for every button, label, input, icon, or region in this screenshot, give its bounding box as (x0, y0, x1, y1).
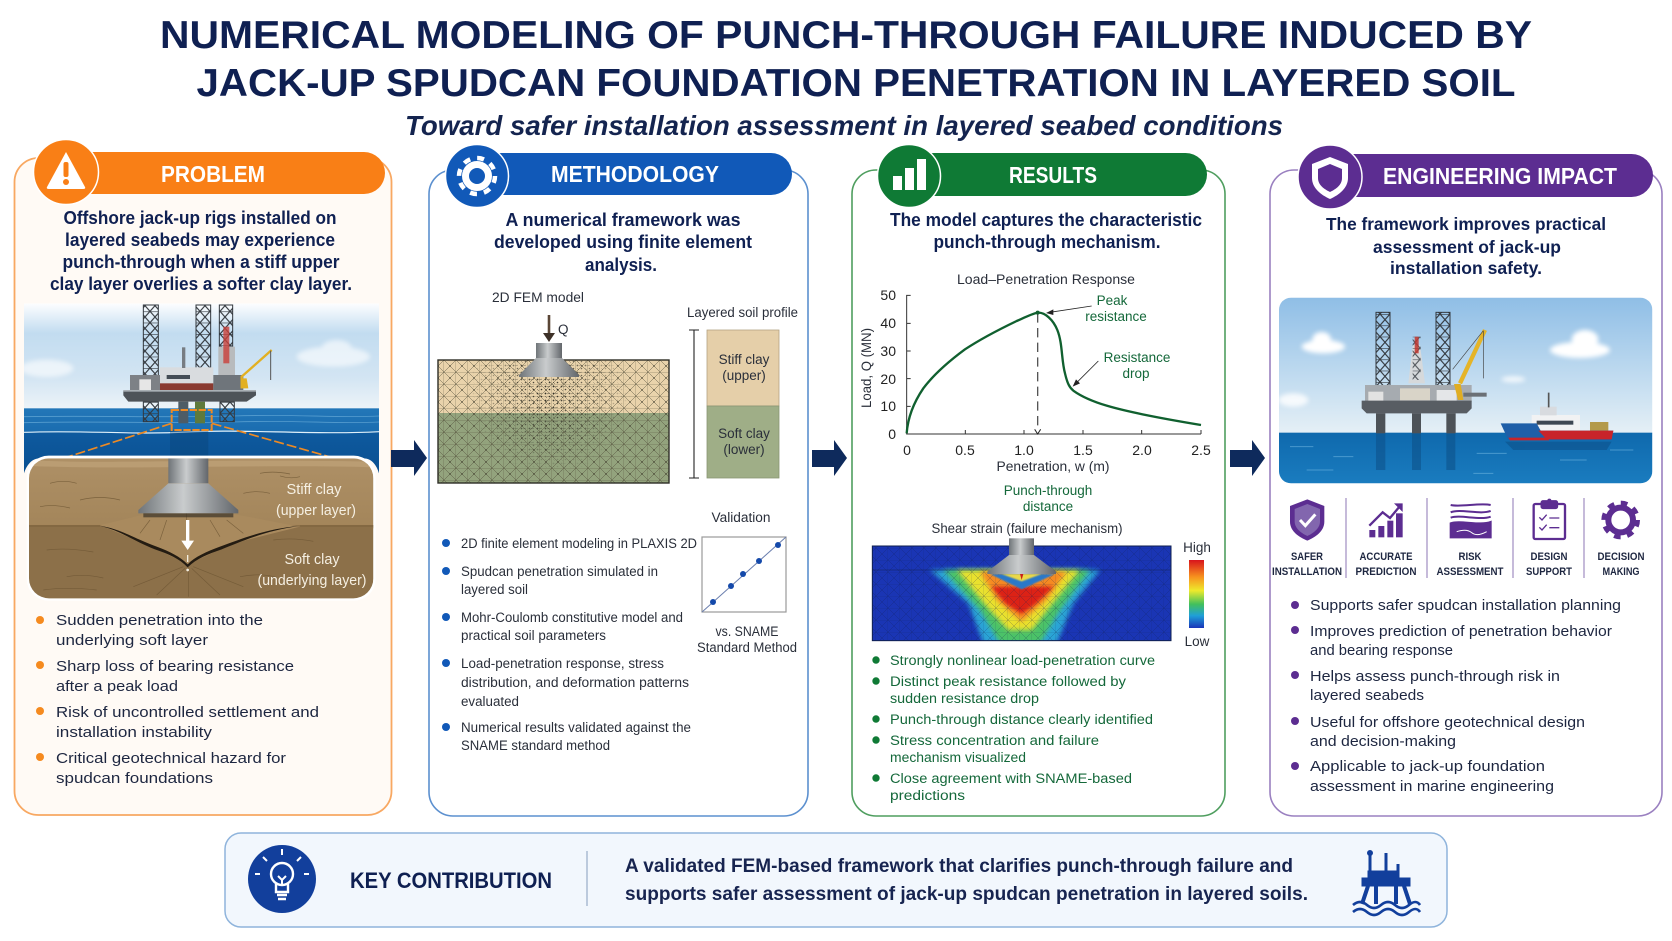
engineering impact header (1298, 145, 1653, 209)
colour scale legend (1183, 540, 1211, 649)
icon labels: PREDICTION (1356, 566, 1417, 578)
engineering impact bullet list: Improves prediction of penetration behavior (1310, 623, 1612, 640)
FEM mesh diagram (438, 290, 669, 483)
problem statement: punch-through when a stiff upper (62, 252, 340, 272)
results bullet list (872, 653, 1155, 803)
shear strain heat map (872, 521, 1171, 643)
icon labels: MAKING (1602, 566, 1640, 578)
line chart: load-penetration response: distance (1023, 499, 1073, 514)
methodology bullet list: Spudcan penetration simulated in (461, 564, 658, 579)
engineering impact bullet list: layered seabeds (1310, 687, 1424, 704)
results bullet list: Stress concentration and failure (890, 733, 1099, 748)
line chart: load-penetration response: 50 (880, 287, 896, 303)
line chart: load-penetration response: resistance (1085, 309, 1147, 324)
icon: decision making (1604, 503, 1637, 537)
problem statement: layered seabeds may experience (65, 230, 335, 250)
methodology bullet list: layered soil (461, 582, 528, 597)
problem bullet list: spudcan foundations (56, 770, 213, 787)
results header (878, 144, 1207, 208)
engineering impact statement: installation safety. (1390, 258, 1542, 278)
line chart: load-penetration response: Resistance (1104, 350, 1170, 365)
results bullet list: Distinct peak resistance followed by (890, 674, 1126, 689)
layered soil profile: Stiff clay (719, 352, 770, 367)
problem bullet list (36, 612, 319, 787)
problem bullet list: Sharp loss of bearing resistance (56, 658, 294, 675)
results statement: punch-through mechanism. (934, 232, 1160, 252)
engineering impact header: ENGINEERING IMPACT (1383, 163, 1617, 189)
soil cross-section (27, 456, 376, 601)
engineering impact bullet list: assessment in marine engineering (1310, 778, 1554, 795)
line chart: load-penetration response: 20 (880, 371, 896, 387)
methodology statement (494, 210, 752, 275)
icon: accurate prediction (1369, 503, 1403, 537)
results bullet list: Punch-through distance clearly identified (890, 712, 1153, 727)
methodology bullet list: distribution, and deformation patterns (461, 675, 689, 690)
methodology bullet list: Mohr-Coulomb constitutive model and (461, 610, 683, 625)
panel: methodology (429, 144, 808, 816)
panel: results (852, 144, 1225, 816)
engineering impact bullet list: Supports safer spudcan installation planning (1310, 597, 1621, 614)
FEM mesh diagram: Q (558, 322, 569, 337)
layered soil profile: Layered soil profile (687, 305, 798, 320)
engineering impact bullet list: and bearing response (1310, 642, 1453, 659)
problem statement: clay layer overlies a softer clay layer. (50, 274, 352, 294)
icon: light bulb (248, 845, 316, 913)
layered soil profile: (upper) (722, 368, 766, 383)
line chart: load-penetration response: Load, Q (MN) (859, 328, 874, 408)
line chart: load-penetration response: 2.5 (1191, 442, 1211, 458)
line chart: load-penetration response: 40 (880, 315, 896, 331)
line chart: load-penetration response (859, 272, 1211, 514)
problem statement (50, 208, 352, 294)
rig (1376, 312, 1390, 386)
icon: design support (1534, 499, 1565, 539)
arrow: methodology to results (812, 440, 847, 476)
engineering impact statement: The framework improves practical (1326, 214, 1606, 234)
line chart: load-penetration response: 30 (880, 343, 896, 359)
problem header (34, 140, 385, 204)
methodology bullet list: 2D finite element modeling in PLAXIS 2D (461, 536, 697, 551)
engineering impact bullet list: Useful for offshore geotechnical design (1310, 714, 1585, 731)
icon labels: SUPPORT (1526, 566, 1572, 578)
results bullet list: predictions (890, 788, 965, 803)
panel: engineering impact (1270, 145, 1662, 816)
methodology bullet list: practical soil parameters (461, 628, 606, 643)
FEM mesh diagram: 2D FEM model (492, 290, 584, 305)
arrow: problem to methodology (391, 440, 427, 476)
key contribution banner (225, 833, 1447, 927)
methodology bullet list: SNAME standard method (461, 738, 610, 753)
icon labels (1272, 551, 1645, 578)
orange zoom call-out (172, 410, 212, 430)
arrow: results to engineering impact (1230, 440, 1265, 476)
soil labels (258, 481, 366, 589)
results bullet list: Close agreement with SNAME-based (890, 771, 1132, 786)
ship (1532, 415, 1580, 431)
panel: problem (14, 140, 392, 815)
results statement: The model captures the characteristic (890, 210, 1202, 230)
line chart: load-penetration response: Punch-through (1004, 483, 1092, 498)
layered soil profile: Soft clay (718, 426, 770, 441)
key contribution text: A validated FEM-based framework that clarifies punch-through failure and (625, 855, 1293, 877)
validation plot: vs. SNAME (716, 624, 778, 639)
methodology statement: A numerical framework was (506, 210, 740, 230)
layered soil profile: (lower) (723, 442, 765, 457)
engineering impact statement: assessment of jack-up (1373, 237, 1561, 257)
impact icon row (1272, 498, 1645, 578)
key contribution label: KEY CONTRIBUTION (350, 868, 552, 893)
engineering impact bullet list: Applicable to jack-up foundation (1310, 758, 1545, 775)
problem bullet list: Critical geotechnical hazard for (56, 750, 286, 767)
problem bullet list: Sudden penetration into the (56, 612, 263, 629)
methodology header (446, 144, 792, 208)
title (160, 14, 1532, 105)
icon labels: SAFER (1291, 551, 1323, 563)
title: JACK-UP SPUDCAN FOUNDATION PENETRATION IN LAYERED SOIL (196, 62, 1516, 105)
validation plot: Standard Method (697, 640, 797, 655)
engineering impact statement (1326, 214, 1606, 278)
problem bullet list: underlying soft layer (56, 632, 208, 649)
icon labels: ASSESSMENT (1436, 566, 1504, 578)
line chart: load-penetration response: Penetration, w (m) (996, 459, 1110, 474)
line chart: load-penetration response: Peak (1097, 293, 1128, 308)
icon labels: RISK (1458, 551, 1482, 563)
colour scale legend: Low (1185, 634, 1210, 649)
engineering impact bullet list: Helps assess punch-through risk in (1310, 668, 1560, 685)
engineering impact bullet list (1291, 597, 1621, 795)
soil labels: (upper layer) (276, 502, 356, 519)
methodology statement: developed using finite element (494, 232, 752, 252)
methodology bullet list: evaluated (461, 694, 519, 709)
results header: RESULTS (1009, 162, 1097, 188)
colour scale legend: High (1183, 540, 1211, 555)
soil labels: Soft clay (284, 551, 340, 568)
illustration: jack-up rig at sea with soil cross-section (20, 303, 379, 601)
methodology bullet list: Load-penetration response, stress (461, 656, 664, 671)
key contribution text (625, 855, 1308, 905)
soil labels: Stiff clay (286, 481, 342, 498)
validation plot (697, 510, 797, 655)
icon labels: INSTALLATION (1272, 566, 1342, 578)
problem statement: Offshore jack-up rigs installed on (64, 208, 336, 228)
line chart: load-penetration response: Load–Penetration Response (957, 272, 1135, 287)
line chart: load-penetration response: drop (1122, 366, 1150, 381)
line chart: load-penetration response: 1.0 (1014, 442, 1034, 458)
line chart: load-penetration response: 1.5 (1073, 442, 1093, 458)
problem bullet list: Risk of uncontrolled settlement and (56, 704, 319, 721)
results bullet list: Strongly nonlinear load-penetration curve (890, 653, 1155, 668)
line chart: load-penetration response: 0 (888, 426, 896, 442)
methodology bullet list (442, 536, 697, 753)
icon labels: DECISION (1598, 551, 1645, 563)
shear strain heat map: Shear strain (failure mechanism) (932, 521, 1122, 536)
line chart: load-penetration response: 10 (880, 398, 896, 414)
engineering impact bullet list: and decision-making (1310, 733, 1456, 750)
icon: risk assessment (1451, 504, 1491, 537)
problem bullet list: after a peak load (56, 678, 178, 695)
key contribution text: supports safer assessment of jack-up spudcan penetration in layered soils. (625, 883, 1308, 905)
line chart: load-penetration response: 2.0 (1132, 442, 1152, 458)
methodology header: METHODOLOGY (551, 161, 719, 187)
subtitle: Toward safer installation assessment in layered seabed conditions (405, 110, 1283, 141)
results statement (890, 210, 1202, 252)
validation plot: Validation (712, 510, 770, 525)
icon labels: ACCURATE (1360, 551, 1412, 563)
icon labels: DESIGN (1530, 551, 1568, 563)
methodology statement: analysis. (585, 255, 657, 275)
line chart: load-penetration response: 0.5 (955, 442, 975, 458)
results bullet list: sudden resistance drop (890, 691, 1039, 706)
icon: safer installation (1290, 499, 1324, 541)
line chart: load-penetration response: 0 (903, 442, 911, 458)
title: NUMERICAL MODELING OF PUNCH-THROUGH FAILURE INDUCED BY (160, 14, 1532, 57)
soil labels: (underlying layer) (258, 572, 366, 589)
illustration: rig and supply vessel (1278, 298, 1652, 483)
methodology bullet list: Numerical results validated against the (461, 720, 691, 735)
icon: offshore platform (1353, 850, 1420, 915)
rig (143, 305, 158, 377)
results bullet list: mechanism visualized (890, 750, 1026, 765)
problem header: PROBLEM (161, 161, 265, 187)
problem bullet list: installation instability (56, 724, 213, 741)
layered soil profile (687, 305, 798, 478)
